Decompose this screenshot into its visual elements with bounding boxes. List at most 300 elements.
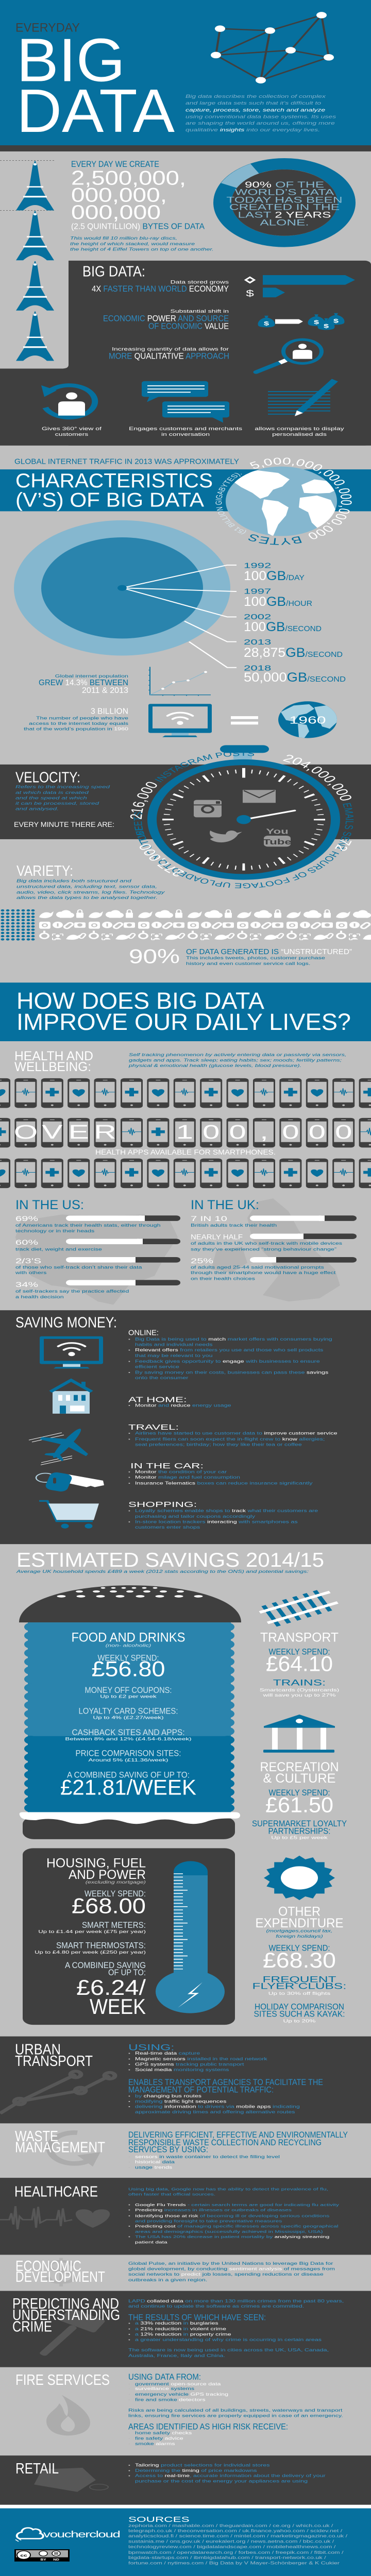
stopwatch — [130, 745, 353, 888]
stat: 3 billion: 3 BILLION — [91, 707, 128, 716]
panel: waste management: SERVICES BY USING: — [128, 2145, 208, 2154]
panel: housing fuel and power: SMART METERS: — [82, 1920, 146, 1930]
panel: in the uk: say they’ve experienced “strong behaviour change” — [191, 1247, 337, 1252]
labels: data volume timeline: 100GB/HOUR — [244, 595, 312, 609]
text: at home: Monitor and reduce energy usage — [135, 1404, 231, 1408]
header background — [0, 0, 371, 145]
icon: globe with curved traffic figure: 5,000,000,000,000,000,000BYTES(51 BILLION GIGABYTES). — [215, 457, 352, 545]
panel: predicting crime: LAPD collated data on more than 130 million crimes from the past 80 years, — [128, 2299, 344, 2303]
intro text: qualitative insights into our everyday lives. — [185, 128, 320, 132]
panel: fire services: Risks are being calculated of all buildings, streets, waterways and transport — [128, 2409, 343, 2413]
text: online — [128, 1329, 332, 1380]
panel: in the us: technology or in their heads — [15, 1229, 94, 1233]
panel: economic development: social networks to predict job losses, spending reductions or disease — [128, 2273, 324, 2277]
stopwatch: 72HOURS OF FOOTAGE UPLOADED TO YOUTUBE — [134, 825, 352, 888]
stat: 3 billion — [24, 707, 128, 732]
panel: fire services: • — [128, 2393, 130, 2396]
velocity text: VELOCITY: — [15, 769, 80, 786]
panel: fire services: • — [128, 2436, 130, 2441]
text: shopping: customers enter shops — [135, 1526, 200, 1530]
burger: food and drinks: CASHBACK SITES AND APPS: — [72, 1727, 185, 1737]
stat: 4x faster: Data stored grows — [171, 280, 229, 285]
every day we create: 000,000, — [71, 183, 167, 206]
panel: fire services: government open-source data — [135, 2382, 221, 2386]
text: other expenditure — [252, 1905, 346, 2024]
panel: retail: Access to real-time, accurate information about the delivery of your — [135, 2474, 326, 2478]
stat: qualitative approach: MORE QUALITATIVE APPROACH — [109, 351, 229, 361]
burger: food and drinks: (non- alcoholic) — [106, 1643, 151, 1648]
burger: food and drinks: MONEY OFF COUPONS: — [85, 1685, 172, 1695]
heading: health and wellbeing — [14, 1049, 346, 1074]
intro text — [185, 94, 336, 132]
panel: fire services: surveillance systems — [135, 2387, 194, 2391]
panel: fire services — [0, 2367, 371, 2455]
captions: benefits: customers — [55, 432, 88, 437]
labels: data volume timeline: 100GB/DAY — [244, 569, 305, 583]
panel: saving money — [0, 1310, 371, 1544]
panel: predicting crime: a greater understanding of why crime is occurring in certain areas — [135, 2338, 322, 2342]
panel: housing fuel and power — [23, 1848, 235, 2025]
stat: economic power: Substantial shift in — [171, 309, 229, 314]
velocity text: at which data is created — [15, 790, 89, 795]
every day we create: the height of 4 Eiffel Towers on top of one another. — [70, 247, 214, 252]
panel: urban transport: Real-time data capture — [135, 2052, 200, 2056]
velocity text — [14, 769, 114, 828]
panel: economic development: Global Pulse, an initiative by the United Nations to leverage Big Data for — [128, 2262, 333, 2266]
dots grid — [1, 909, 35, 941]
panel: in the us: with others — [15, 1271, 46, 1275]
text: online: habits and individual needs — [135, 1343, 213, 1347]
stat: internet population grew: 2011 & 2013 — [82, 686, 128, 695]
panel: in the uk: through their smartphone would have a huge effect — [191, 1271, 336, 1275]
panel: housing fuel and power: Up to £1.44 per week (£75 per year) — [38, 1929, 146, 1934]
phones: health apps rows: 1 — [176, 1121, 193, 1143]
title: everyday big data: EVERYDAY — [15, 21, 80, 35]
icon: monitor wifi — [40, 1336, 103, 1368]
labels: data volume timeline: 28,875GB/SECOND — [244, 646, 343, 660]
burger: food and drinks: £56.80 — [91, 1657, 165, 1681]
panel: urban transport: GPS systems tracking public transport — [135, 2063, 244, 2067]
panel: waste management: • — [128, 2160, 130, 2164]
icon: magnifier person — [256, 340, 322, 372]
labels: data volume timeline — [244, 562, 346, 685]
text: travel — [128, 1423, 338, 1447]
footer: sources and logo: technologyreview.com / bigdatalandscape.com / mobilehealthnews.com / — [128, 2545, 335, 2549]
burger: food and drinks: PRICE COMPARISON SITES: — [75, 1749, 181, 1758]
panel: waste management: • — [128, 2155, 130, 2159]
variety text: Big data includes both structured and — [16, 879, 132, 884]
labels: data volume timeline: 2013 — [244, 638, 271, 647]
panel: healthcare: Predicting increases in illnesses or outbreaks of diseases — [135, 2208, 292, 2212]
footer: sources and logo: bpmwatch.com / opendatarearch.org / forbes.com / freepik.com / fitbit.com / — [128, 2551, 344, 2555]
panel: economic development: global development, by conducting sentiment analysis of messages from — [128, 2267, 335, 2272]
velocity dark band — [0, 765, 371, 839]
panel: predicting crime: • — [128, 2338, 130, 2342]
text: transport savings: Smartcards (Oystercards) — [260, 1688, 340, 1692]
text: in the car: • — [128, 1476, 130, 1480]
panel: in the uk: 25% — [191, 1257, 213, 1265]
panel: healthcare: • — [128, 2214, 130, 2218]
panel: in the uk: of adults aged 25-44 said motivational prompts — [191, 1265, 324, 1270]
phones: health apps rows — [0, 1078, 371, 1188]
panel: healthcare: • — [128, 2203, 130, 2207]
panel: urban transport: delivering information to drivers via mobile apps indicating — [135, 2105, 300, 2109]
text: transport savings: £64.10 — [266, 1652, 333, 1675]
panel: healthcare: areas and demographics (successfully achieved in Mississippi, USA) — [135, 2230, 323, 2234]
text: recreation and culture: Up to £5 per week — [271, 1836, 328, 1840]
stat: 3 billion: that of the world’s population in 1960 — [24, 727, 128, 732]
panel: urban transport: Magnetic sensors installed in the road network — [135, 2057, 268, 2061]
panel: healthcare: and providing foresight to take preventative measures — [135, 2219, 282, 2224]
stat: 90% unstructured: 90% — [129, 945, 180, 968]
panel: housing fuel and power: WEEKLY SPEND: — [85, 1889, 146, 1899]
text: online: Big Data is being used to match market offers with consumers buying — [135, 1337, 332, 1342]
panel: predicting crime: • — [128, 2333, 130, 2336]
caption: health apps: HEALTH APPS AVAILABLE FOR SMARTPHONES. — [95, 1148, 276, 1156]
icon: thermometer — [156, 1861, 225, 2013]
heading: health and wellbeing: gadgets and apps. Track sleep; eating habits; sex; moods; fertility patterns; — [129, 1058, 342, 1063]
every day we create: EVERY DAY WE CREATE — [71, 159, 159, 169]
text: online: ONLINE: — [128, 1329, 159, 1337]
background maps — [15, 1198, 340, 1305]
panel: in the uk: British adults track their health — [191, 1224, 277, 1228]
heading: health and wellbeing: Self tracking phenomenon by actively entering data or passively via sensors, — [129, 1053, 346, 1057]
phones: health apps rows: V — [42, 1121, 63, 1143]
donut chart: 90% of world's data: LAST 2 YEARS — [238, 210, 331, 219]
donut chart: 90% of world's data: ALONE. — [260, 218, 309, 227]
stopwatch: 277,000TWEETS — [134, 812, 184, 876]
phones: health apps rows: 0 — [309, 1121, 326, 1143]
text: online: efficient service — [135, 1365, 179, 1369]
icon: sun — [264, 1856, 335, 1900]
heading: estimated savings: Average UK household spends £489 a week (2012 stats according to the ONS) and potential savings: — [16, 1569, 309, 1574]
text: travel: seat preferences; birthday; how they like their tea or coffee — [135, 1443, 302, 1447]
panel: healthcare: • — [128, 2235, 130, 2239]
intro text: Big data describes the collection of complex — [185, 94, 326, 99]
burger: food and drinks: FOOD AND DRINKS — [71, 1631, 185, 1645]
heading: health and wellbeing: HEALTH AND — [14, 1049, 93, 1063]
variety text: VARIETY: — [16, 863, 73, 879]
text: other expenditure: FLYER CLUBS: — [252, 1981, 346, 1991]
panel: predicting crime: THE RESULTS OF WHICH HAVE SEEN: — [128, 2313, 266, 2322]
panel: in the uk: NEARLY HALF — [191, 1233, 243, 1241]
panel: economic development — [0, 2252, 371, 2292]
panel: urban transport: approximate driving times and offering alternative routes — [135, 2110, 295, 2114]
title: everyday big data: BIG — [16, 26, 125, 94]
labels: data volume timeline: 2002 — [244, 613, 271, 621]
donut chart: 90% of world's data: CREATED IN THE — [229, 202, 340, 212]
footer: sources and logo: SOURCES — [128, 2515, 190, 2524]
text: at home: • — [128, 1404, 130, 1408]
phones: health apps rows: R — [94, 1121, 116, 1143]
panel: urban transport: • — [128, 2052, 130, 2056]
labels: data volume timeline: 1997 — [244, 587, 271, 596]
panel: retail: purchase or the cost of the energy your appliances are using — [135, 2480, 308, 2484]
panel: predicting crime — [0, 2291, 371, 2367]
icon: data network — [211, 12, 334, 83]
icon: museum building — [263, 1715, 335, 1753]
text: travel: Frequent fliers can soon expect the in-flight crew to know allergies; — [135, 1437, 325, 1442]
text: shopping: purchasing and tailor coupons accordingly — [135, 1515, 256, 1519]
panel: predicting crime: The software is now being used in cities across the UK, USA, Canada, — [128, 2348, 329, 2352]
panel: retail — [0, 2455, 371, 2505]
every day we create: 2,500,000, — [71, 166, 186, 189]
stat: 3 billion: The number of people who have — [36, 716, 128, 721]
panel: healthcare: patient data — [135, 2241, 167, 2245]
panel: predicting crime: • — [128, 2327, 130, 2331]
text: shopping: • — [128, 1520, 130, 1524]
panel: healthcare: HEALTHCARE — [14, 2183, 98, 2200]
panel: urban transport: • — [128, 2057, 130, 2061]
stat: 4x faster: 4X FASTER THAN WORLD ECONOMY — [92, 284, 229, 294]
panel: retail: • — [128, 2474, 130, 2478]
panel: urban transport: • — [128, 2094, 130, 2098]
text: online: By saving money on their costs, businesses can pass these savings — [135, 1370, 328, 1375]
footer: sources and logo: cc — [20, 2553, 27, 2558]
panel: fire services: • — [128, 2382, 130, 2386]
icon: speech bubbles — [142, 381, 229, 422]
panel: economic development: $ — [45, 2252, 77, 2292]
line chart — [148, 667, 211, 696]
panel: fire services: smoke alarms — [135, 2442, 175, 2446]
panel: in the us: 2/3’S — [15, 1257, 41, 1265]
stat: 90% unstructured: This includes tweets, photos, customer purchase — [186, 956, 325, 960]
stopwatch: 216,000INSTAGRAM POSTS — [130, 752, 254, 819]
panel: in the us: 69% — [15, 1214, 38, 1223]
velocity text: EVERY MINUTE THERE ARE: — [14, 820, 114, 828]
burger: food and drinks: £21.81/WEEK — [60, 1775, 196, 1800]
text: other expenditure: OTHER — [278, 1905, 321, 1919]
panel: urban transport: modifying traffic light sequences — [135, 2099, 226, 2104]
panel: housing fuel and power: WEEK — [90, 1994, 146, 2019]
icon: money bags — [258, 313, 344, 330]
variety text — [16, 863, 165, 900]
text: in the car: Insurance Telematics boxes can reduce insurance significantly — [135, 1481, 313, 1486]
stat: internet population grew: Global internet population — [55, 674, 128, 679]
text: online: • — [128, 1360, 130, 1364]
panel: waste management: usage trends — [135, 2166, 172, 2170]
donut chart: 90% of world's data: TODAY HAS BEEN — [226, 195, 343, 205]
labels: data volume timeline: 50,000GB/SECOND — [244, 670, 346, 685]
panel: in the us: a health decision — [15, 1295, 64, 1299]
panel: waste management: WASTE — [15, 2128, 58, 2145]
panel: healthcare: Using big data, Google now has the ability to detect the prevalence of flu, — [128, 2188, 328, 2192]
text: shopping: SHOPPING: — [128, 1500, 197, 1509]
captions: benefits: in conversation — [161, 432, 210, 437]
panel: in the uk: on their health choices — [191, 1277, 255, 1281]
icon band: data types — [37, 909, 371, 941]
velocity text: it can be processed, stored — [15, 801, 99, 806]
global internet traffic heading: GLOBAL INTERNET TRAFFIC IN 2013 WAS APPROXIMATELY — [14, 457, 239, 466]
text: shopping: In-store location trackers interacting with smartphones as — [135, 1520, 298, 1524]
text: in the car: Monitor milage and fuel consumption — [135, 1476, 240, 1480]
captions: benefits: Gives 360° view of — [42, 426, 102, 431]
footer: sources and logo: ND — [53, 2558, 59, 2561]
panel: economic development: DEVELOPMENT — [15, 2269, 105, 2285]
text: online: Relevant offers from retailers you use and those who sell products — [135, 1348, 323, 1352]
panel: waste management: • — [128, 2166, 130, 2170]
title: everyday big data — [15, 21, 175, 145]
panel: healthcare: Google Flu Trends - certain search terms are good for indicating flu activity — [135, 2203, 339, 2207]
text: transport savings: TRAINS: — [273, 1678, 326, 1687]
panel: fire services: • — [128, 2387, 130, 2391]
footer: sources and logo: vouchercloud — [43, 2529, 120, 2539]
panel: in the us: IN THE US: — [15, 1198, 84, 1212]
panel: predicting crime: • — [128, 2321, 130, 2326]
text: at home — [128, 1396, 231, 1408]
dashed tower guides — [0, 160, 54, 361]
footer: sources and logo: sustainia.me / ons.gov.uk / eurekalert.org / news.aetna.com / bbc.co.uk / — [128, 2540, 334, 2544]
every day we create: 000,000 — [71, 201, 161, 223]
velocity text: Refers to the increasing speed — [15, 785, 110, 789]
text: other expenditure: FREQUENT — [263, 1975, 336, 1984]
panel: urban transport: • — [128, 2068, 130, 2072]
text: in the car: • — [128, 1481, 130, 1485]
panel: waste management: sensors in waste container to detect the filling level — [135, 2155, 280, 2159]
panel: waste management: MANAGEMENT — [15, 2139, 105, 2156]
panel: urban transport: • — [128, 2063, 130, 2066]
captions: benefits: personalised ads — [272, 432, 327, 437]
panel: retail: Tailoring product selections for individual stores — [135, 2463, 269, 2468]
variety text: unstructured data, including text, sensor data, — [16, 885, 157, 889]
intro text: capture, process, store, search and analyze — [185, 108, 326, 113]
burger: food and drinks: Around 5% (£11.36/week) — [89, 1758, 168, 1762]
panel: urban transport — [0, 2037, 371, 2123]
stat: internet population grew — [39, 674, 128, 695]
panel: urban transport: USING: — [128, 2042, 175, 2052]
burger: food and drinks — [19, 1585, 241, 1839]
panel: in the uk: 7 IN 10 — [191, 1214, 227, 1223]
phones: health apps rows: E — [69, 1121, 89, 1143]
panel: retail: • — [128, 2469, 130, 2473]
labels: data volume timeline: 100GB/SECOND — [244, 620, 322, 634]
stat: internet population grew: GREW 14.3% BETWEEN — [39, 679, 128, 687]
text: SAVING MONEY: — [15, 1314, 117, 1331]
icon: four eiffel towers — [16, 161, 54, 361]
footer: sources and logo: BY — [40, 2558, 46, 2561]
text: online: Feedback gives opportunity to engage with businesses to ensure — [135, 1360, 320, 1364]
donut chart: 90% of world's data: WORLD’S DATA — [235, 187, 334, 197]
panel: in the uk: IN THE UK: — [191, 1198, 259, 1212]
panel: fire services: home safety checks — [135, 2431, 192, 2435]
panel: predicting crime: CRIME — [12, 2318, 52, 2335]
panel: predicting crime: a 21% reduction in violent crime — [135, 2327, 226, 2331]
panel: healthcare: Predicting cost of managing specific illnesses across specific geographical — [135, 2224, 339, 2229]
panel: predicting crime: a 33% reduction in burglaries — [135, 2321, 218, 2326]
text: shopping — [128, 1500, 318, 1530]
stat: economic power: OF ECONOMIC VALUE — [148, 321, 229, 331]
footer: sources and logo: analyticscloud.fi / science.time.com / mintel.com / marketingmagazine.co.uk / — [128, 2534, 347, 2538]
text: online: • — [128, 1348, 130, 1352]
intro text: are shaping the world around us, offering more — [185, 121, 335, 126]
panel: healthcare: • — [128, 2224, 130, 2228]
phones: health apps rows: 0 — [203, 1121, 220, 1143]
every day we create: the height of which stacked, would measure — [70, 242, 195, 246]
panel: fire services: • — [128, 2442, 130, 2446]
text: travel: • — [128, 1437, 130, 1441]
stopwatch: Tube — [263, 838, 292, 846]
icon: rail tracks — [256, 1587, 342, 1628]
stat: 4x faster — [92, 280, 229, 294]
text: shopping: • — [128, 1509, 130, 1513]
burger: food and drinks: Between 8% and 12% (£4.54-6.18/week) — [65, 1737, 192, 1741]
icon: plane — [29, 1420, 104, 1466]
panel: retail: • — [128, 2463, 130, 2467]
footer: sources and logo: bigdata-startups.com / ibmbigdatahub.com / transport-network.co.uk / — [128, 2556, 326, 2560]
text: other expenditure: (mortgages,council tax, — [266, 1929, 333, 1934]
variety text: allows the data types to be analysed together. — [16, 895, 158, 900]
panel: waste management — [0, 2123, 371, 2178]
panel: housing fuel and power: £6.24/ — [76, 1975, 146, 1999]
panel: in the us: of self-trackers say the practice affected — [15, 1290, 129, 1294]
panel: housing fuel and power: OF UP TO: — [108, 1968, 146, 1977]
panel: economic development: outbreaks in a given region. — [128, 2278, 207, 2282]
panel: in the uk — [191, 1198, 357, 1281]
panel: in the us: 34% — [15, 1280, 38, 1289]
heading: big data: BIG DATA: — [82, 263, 145, 280]
stopwatch: You — [266, 827, 289, 836]
captions: benefits — [42, 426, 344, 437]
text: in the car: IN THE CAR: — [130, 1462, 204, 1470]
donut chart: 90% of world's data: 90% OF THE — [245, 180, 324, 190]
panel: healthcare: • — [128, 2208, 130, 2212]
panel: in the us: track diet, weight and exercise — [15, 1247, 102, 1252]
panel: predicting crime: a 12% reduction in property crime — [135, 2333, 231, 2337]
text: travel: TRAVEL: — [128, 1423, 179, 1432]
text: travel: Airlines have started to use customer data to improve customer service — [135, 1432, 338, 1436]
intro text: using conventional data base systems. Its uses — [185, 114, 336, 120]
heading: health and wellbeing: WELLBEING: — [14, 1060, 91, 1074]
panel: urban transport: URBAN — [15, 2041, 61, 2058]
text: transport savings: will save you up to 27% — [262, 1693, 335, 1698]
panel: housing fuel and power: £68.00 — [72, 1894, 146, 1918]
banner: characteristics — [0, 469, 371, 511]
icon: monitor wifi equals globe 1960: 1960 — [289, 714, 326, 726]
footer: sources and logo: fortune.com / nytimes.com / Big Data by V Mayer-Schönberger & K Cukier — [128, 2561, 340, 2566]
panel: in the uk: of adults in the UK who self-track with mobile devices — [191, 1242, 342, 1246]
footer: sources and logo: telegraph.co.uk / theconversation.com / uk.finance.yahoo.com / scidev.net / — [128, 2529, 342, 2533]
panel: fire services: emergency vehicle GPS tracking — [135, 2393, 228, 2397]
panel: predicting crime: and continue to update the software as crimes are committed. — [128, 2304, 304, 2309]
panel: fire services: fire and smoke detectors — [135, 2398, 206, 2402]
text: travel: • — [128, 1432, 130, 1435]
panel: urban transport: by changing bus routes — [135, 2094, 201, 2098]
icon: house — [50, 1380, 92, 1414]
heading: health and wellbeing: physical & emotional health (glucose levels, blood pressure). — [128, 1064, 301, 1068]
text: in the car: Monitor the condition of your car — [135, 1470, 227, 1475]
captions: benefits: allows companies to display — [255, 426, 344, 431]
phones: health apps rows: O — [14, 1121, 38, 1143]
velocity text: and analysed. — [15, 807, 59, 811]
velocity text: and the speed at which — [15, 796, 87, 801]
panel: housing fuel and power: (excluding mortgage) — [86, 1880, 146, 1885]
panel: in the us: of Americans track their health stats, either through — [15, 1224, 161, 1228]
panel: healthcare — [0, 2178, 371, 2255]
text: other expenditure: Up to 20% — [283, 2019, 315, 2024]
burger: food and drinks: Up to £2 per week — [100, 1694, 157, 1699]
stat: economic power: ECONOMIC POWER AND SOURCE — [103, 313, 229, 323]
icon: car key — [36, 1471, 104, 1493]
panel: urban transport: • — [128, 2105, 130, 2109]
text: online: onto the consumer — [135, 1376, 189, 1380]
panel: in the us — [15, 1198, 180, 1299]
icon: pencil and lines — [268, 379, 338, 416]
banner: characteristics: CHARACTERISTICS — [15, 469, 213, 492]
banner: how does big data improve our daily lives — [0, 982, 371, 1041]
panel: predicting crime: PREDICTING AND — [12, 2295, 119, 2312]
text: in the car: • — [128, 1470, 130, 1474]
panel: fire services: USING DATA FROM: — [128, 2372, 201, 2382]
